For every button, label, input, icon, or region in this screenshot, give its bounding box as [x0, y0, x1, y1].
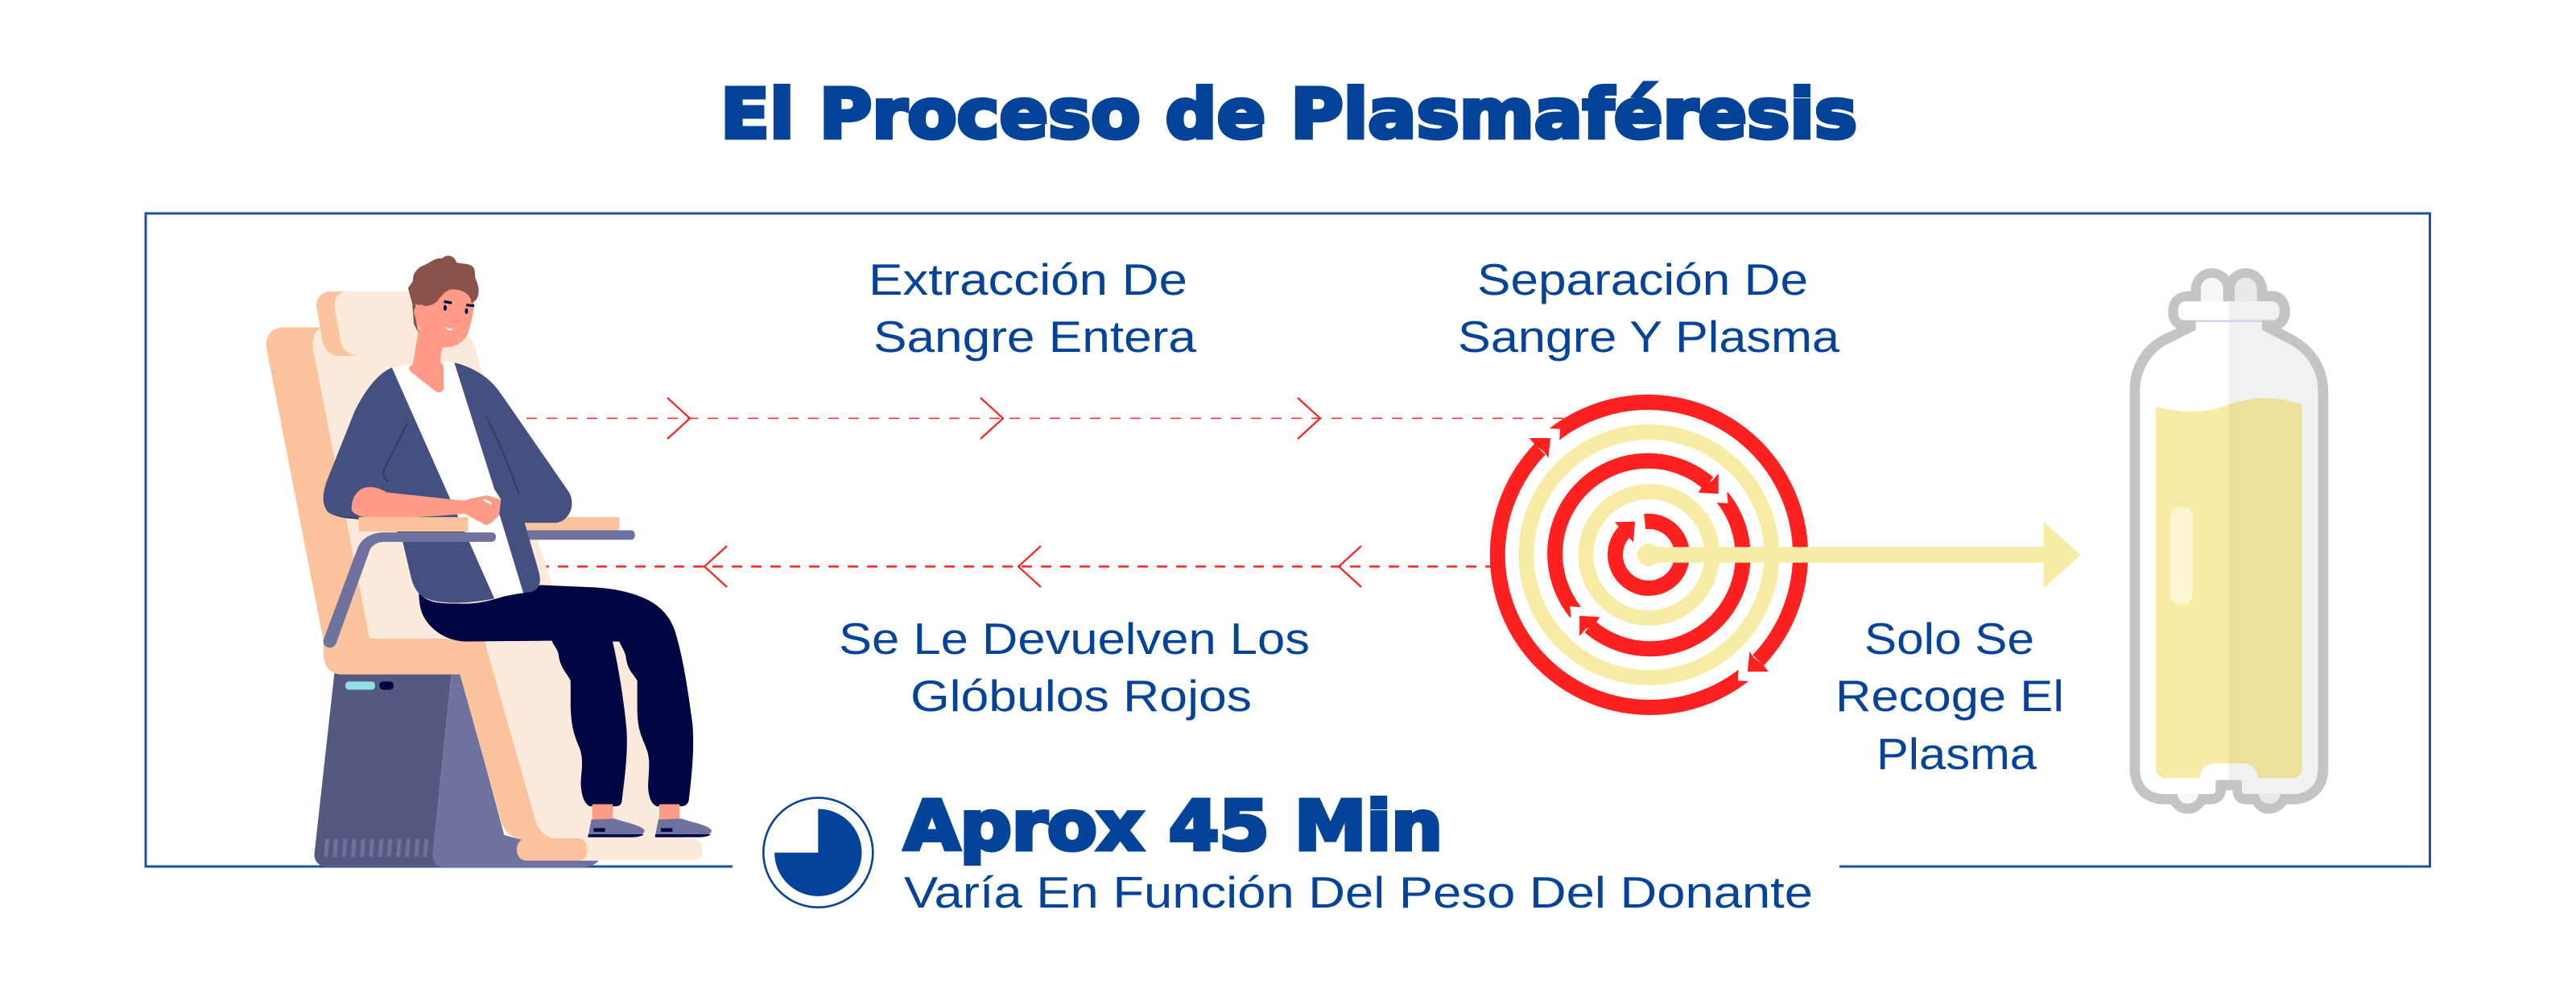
feet and shoes — [588, 804, 712, 838]
heading: red blood cells returned — [839, 614, 1310, 721]
icon: clock three quarters — [763, 798, 873, 908]
heading: separation: Separación De — [1477, 254, 1808, 304]
plasma shaded side — [2229, 398, 2302, 778]
heading: separation — [1458, 254, 1839, 362]
jacket right side and sleeve — [454, 362, 572, 593]
heading: only plasma collected — [1835, 614, 2064, 779]
left armrest — [324, 517, 496, 647]
heading: red blood cells returned: Glóbulos Rojos — [910, 671, 1252, 721]
heading: red blood cells returned: Se Le Devuelven Los — [839, 614, 1310, 664]
cream rings — [1526, 432, 1772, 678]
right armrest — [521, 517, 635, 540]
bottle shaded side — [2229, 301, 2318, 794]
cap details — [2178, 278, 2281, 804]
jacket left side — [324, 367, 494, 603]
heading: extraction — [869, 254, 1196, 362]
heading: extraction: Extracción De — [869, 254, 1187, 304]
icon: plasma collection bottle — [2130, 268, 2328, 814]
chair seat and back — [266, 292, 702, 861]
bottle body — [2140, 278, 2318, 804]
plasma liquid — [2156, 399, 2302, 778]
arrow: red blood cells return dashed line — [539, 546, 1491, 587]
heading: only plasma collected: Recoge El — [1835, 671, 2064, 721]
arrow: whole blood extraction dashed line — [526, 398, 1563, 439]
jacket seams — [383, 418, 519, 494]
title: El Proceso de Plasmaféresis — [720, 75, 1857, 155]
plasma output arrow — [1637, 522, 2080, 589]
heading: extraction: Sangre Entera — [873, 312, 1196, 362]
bottle outline — [2130, 268, 2328, 814]
white shirt — [392, 362, 524, 598]
duration callout: Varía En Función Del Peso Del Donante — [904, 867, 1813, 917]
liquid highlight — [2170, 507, 2193, 605]
icon: centrifuge spiral — [1497, 403, 2080, 707]
duration callout — [904, 787, 1813, 917]
heading: separation: Sangre Y Plasma — [1458, 312, 1839, 362]
trousers — [419, 585, 693, 806]
red circular arrows — [1497, 403, 1801, 707]
heading: only plasma collected: Solo Se — [1864, 614, 2034, 664]
illustration: patient seated in donation chair — [266, 256, 712, 867]
forearm and hands — [330, 487, 501, 525]
panel: process frame — [146, 213, 2429, 866]
neck — [409, 329, 444, 392]
duration callout: Aprox 45 Min — [904, 787, 1443, 866]
chair base — [315, 672, 600, 867]
head — [408, 256, 479, 347]
heading: only plasma collected: Plasma — [1876, 729, 2037, 779]
